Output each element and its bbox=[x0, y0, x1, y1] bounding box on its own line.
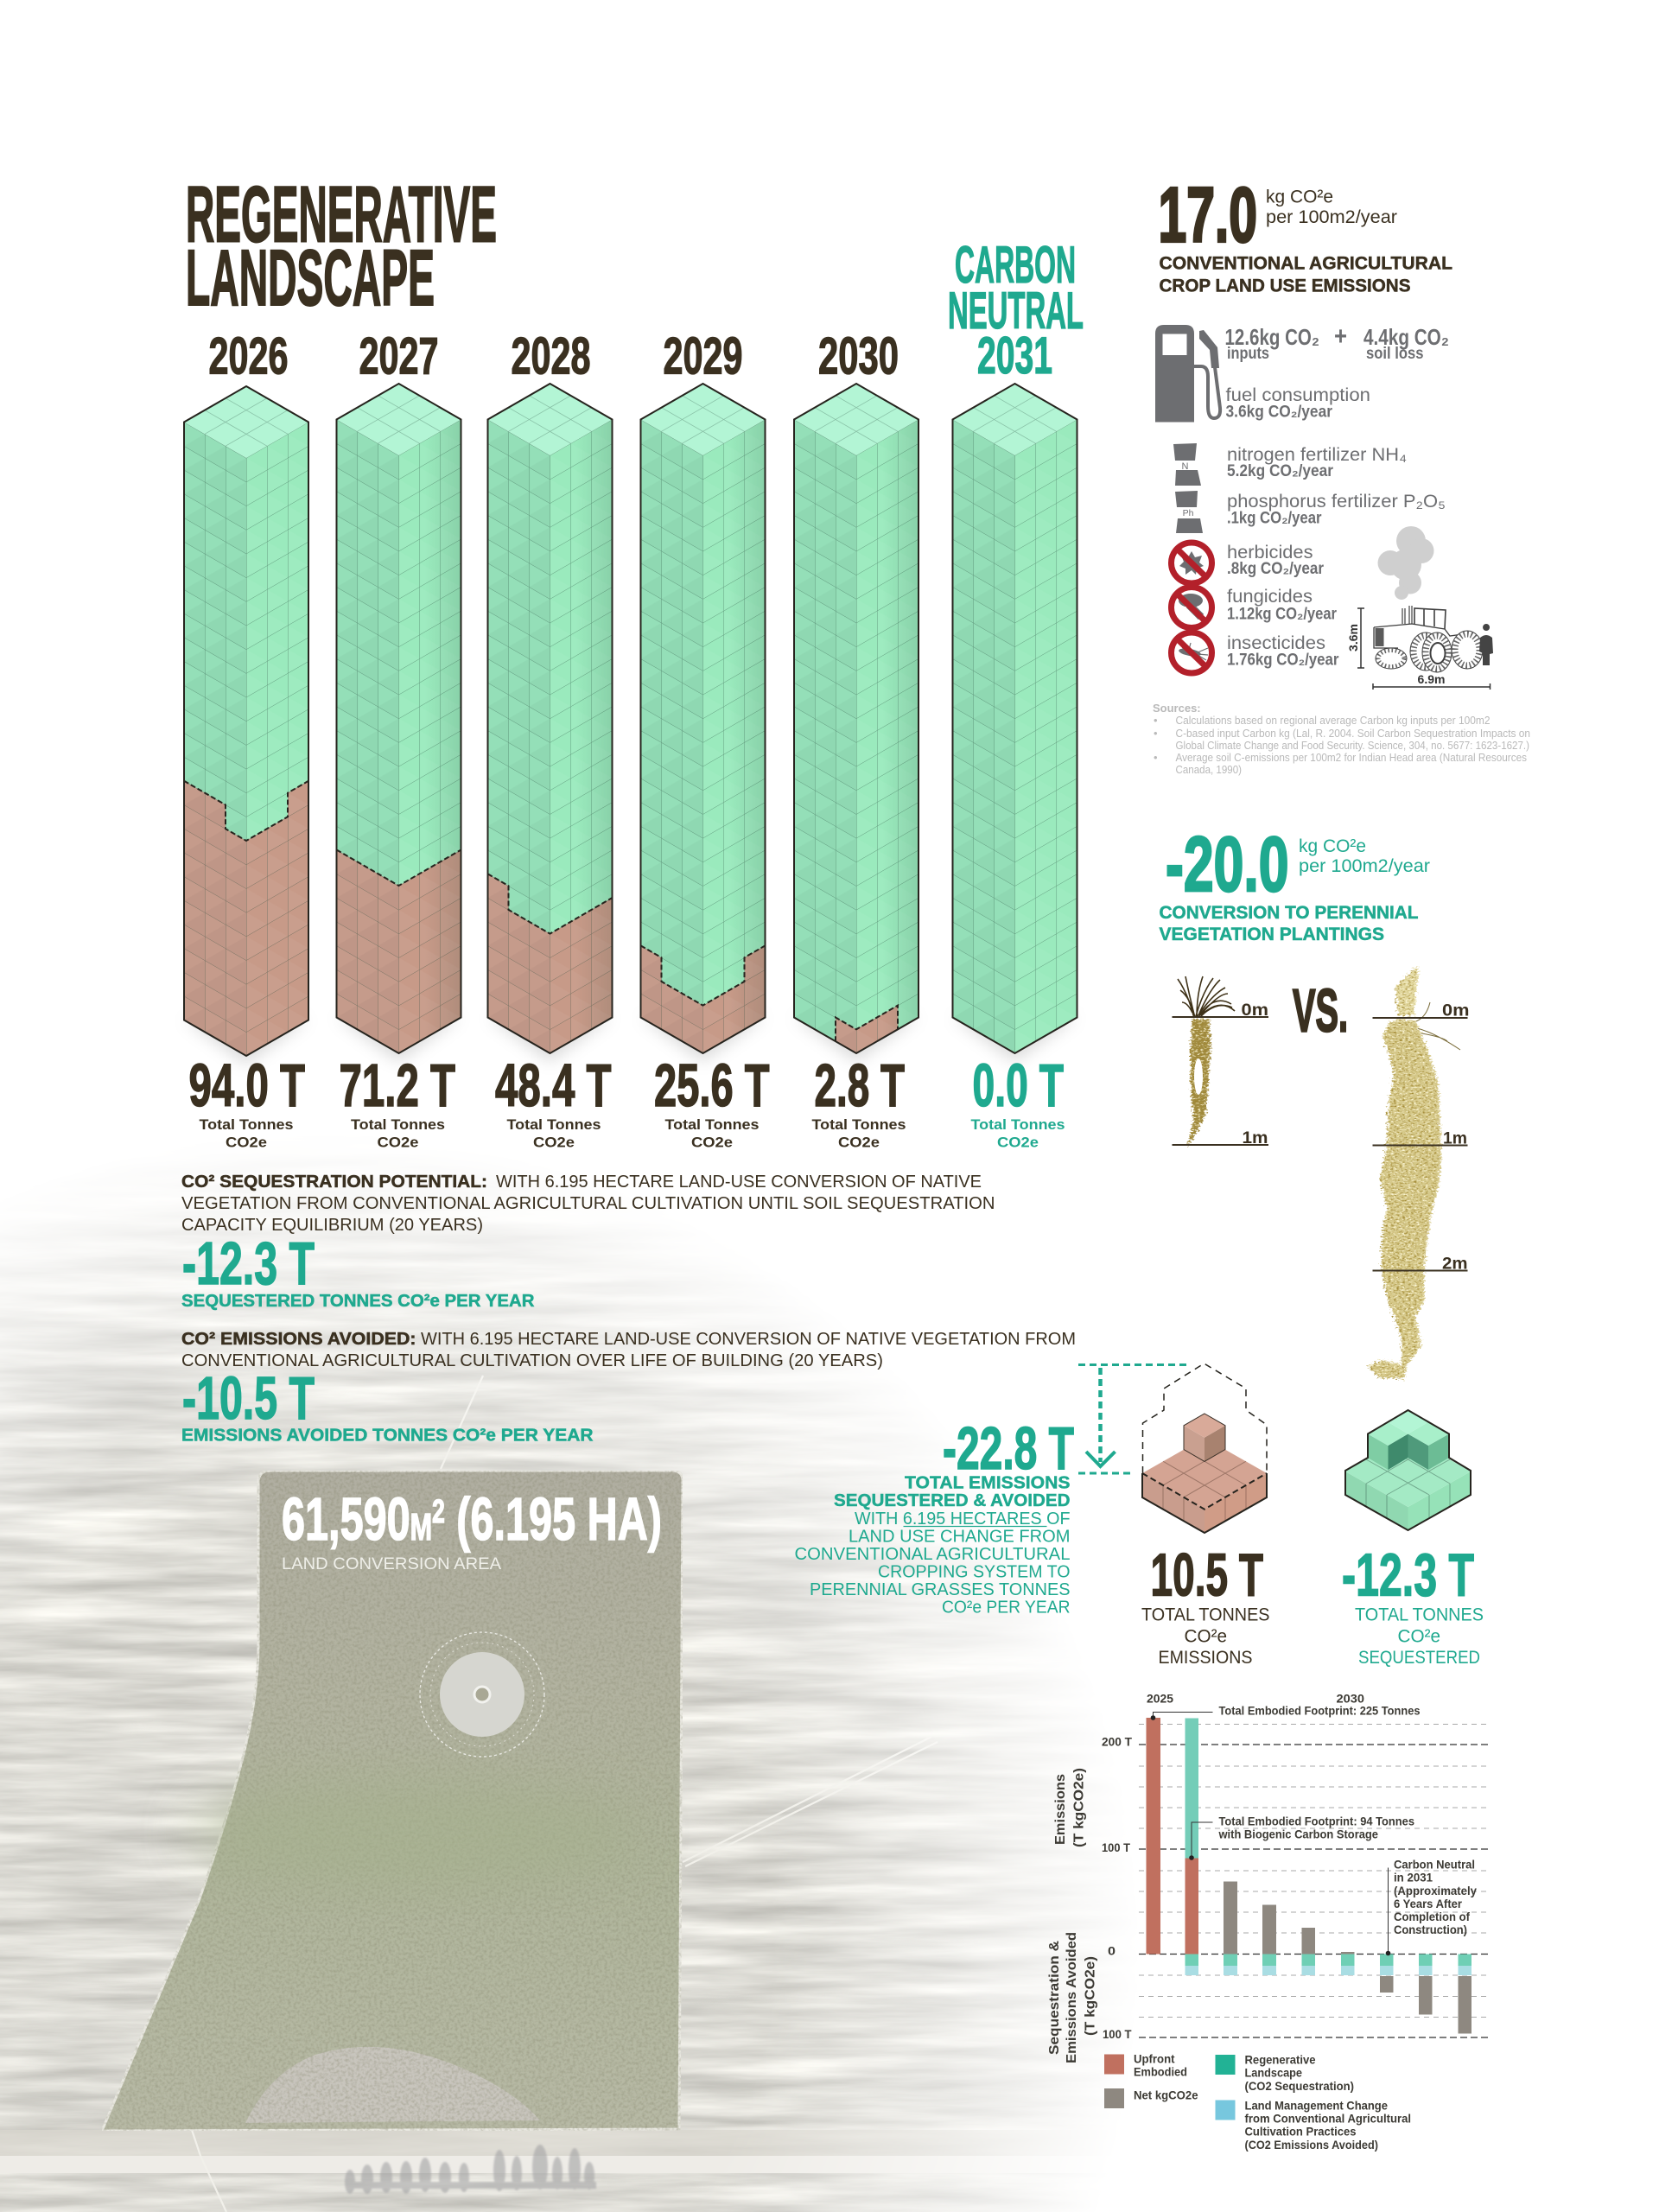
fungicides: fungicides bbox=[1227, 587, 1313, 607]
legend: (CO2 Sequestration) bbox=[1244, 2079, 1354, 2093]
callout: carbon neutral: 6 Years After bbox=[1394, 1897, 1463, 1910]
column total captions: CO2e bbox=[838, 1135, 880, 1151]
sources: Average soil C-emissions per 100m2 for Indian Head area (Natural Resources bbox=[1175, 751, 1527, 764]
legend: Cultivation Practices bbox=[1244, 2124, 1357, 2138]
stat: emissions total bbox=[1141, 1541, 1270, 1668]
column totals: 71.2 T bbox=[339, 1052, 455, 1119]
callout: carbon neutral: Carbon Neutral bbox=[1394, 1858, 1475, 1872]
column totals: 25.6 T bbox=[654, 1052, 769, 1119]
icon: sequestration cubes bbox=[1345, 1410, 1471, 1530]
phosphorus fertilizer bbox=[1227, 492, 1446, 527]
insecticides bbox=[1227, 633, 1339, 669]
stat: sequestered total: TOTAL TONNES bbox=[1355, 1605, 1484, 1624]
stat: -20.0: kg CO²e bbox=[1299, 836, 1366, 856]
scale: perennial root depths bbox=[1372, 1002, 1469, 1274]
text block: total emissions: CONVENTIONAL AGRICULTURAL bbox=[795, 1545, 1070, 1564]
callout: 94 tonnes bbox=[1189, 1815, 1414, 1860]
inputs and soil loss: 4.4kg CO₂ bbox=[1363, 324, 1449, 350]
text block: sequestration potential: WITH 6.195 HECTARE LAND-USE CONVERSION OF NATIVE bbox=[496, 1173, 982, 1192]
nitrogen fertilizer bbox=[1227, 445, 1407, 480]
insecticides: 1.76kg CO₂/year bbox=[1227, 652, 1339, 669]
sources: C-based input Carbon kg (Lal, R. 2004. Soil Carbon Sequestration Impacts on bbox=[1175, 727, 1530, 740]
root: annual crop bbox=[1178, 976, 1235, 1146]
title: REGENERATIVE bbox=[186, 171, 497, 259]
gravel pit bbox=[245, 2047, 540, 2123]
y axis titles bbox=[1047, 1768, 1097, 2063]
axis values: 100 T bbox=[1103, 2027, 1132, 2041]
dimension: 6.9m bbox=[1373, 672, 1490, 690]
legend: Land Management Change bbox=[1244, 2098, 1388, 2112]
year labels: 2030 bbox=[818, 327, 899, 385]
icon: no insecticides bbox=[1172, 632, 1211, 673]
dimension: 3.6m bbox=[1346, 608, 1364, 668]
column 2031 bbox=[952, 384, 1077, 1062]
heading: conventional: CONVENTIONAL AGRICULTURAL bbox=[1160, 254, 1452, 273]
stat: sequestered total: CO²e bbox=[1398, 1626, 1440, 1647]
land conversion parcel bbox=[102, 1471, 683, 2131]
column total captions: Total Tonnes bbox=[506, 1117, 601, 1133]
stat: -20.0: -20.0 bbox=[1166, 822, 1289, 908]
axis values: 200 T bbox=[1102, 1735, 1132, 1749]
stat: emissions total: TOTAL TONNES bbox=[1141, 1605, 1270, 1624]
text block: emissions avoided: CONVENTIONAL AGRICULTURAL CULTIVATION OVER LIFE OF BUILDING (20 YEARS) bbox=[181, 1351, 883, 1370]
axis values: 2030 bbox=[1336, 1692, 1364, 1706]
column total captions: Total Tonnes bbox=[971, 1117, 1065, 1133]
stat: emissions total: CO²e bbox=[1184, 1626, 1227, 1647]
stat: sequestered tonnes: SEQUESTERED TONNES CO²e PER YEAR bbox=[181, 1292, 535, 1311]
herbicides: herbicides bbox=[1227, 543, 1313, 563]
text block: sequestration potential: VEGETATION FROM CONVENTIONAL AGRICULTURAL CULTIVATION UNTIL SOIL SEQUESTRATION bbox=[181, 1194, 995, 1213]
area figure: 61,590M bbox=[282, 1485, 467, 1553]
stat: 17.0: per 100m2/year bbox=[1266, 207, 1397, 227]
column total captions: CO2e bbox=[377, 1135, 418, 1151]
text block: sequestration potential bbox=[181, 1173, 995, 1235]
axis values: 100 T bbox=[1102, 1840, 1130, 1854]
y axis titles: Emissions Avoided bbox=[1065, 1932, 1079, 2063]
text block: sequestration potential: CO² SEQUESTRATION POTENTIAL: bbox=[181, 1173, 487, 1192]
icon: nitrogen bags: N bbox=[1182, 461, 1189, 472]
bars bbox=[1146, 1718, 1471, 2034]
fungicides bbox=[1227, 587, 1338, 624]
stat: emissions avoided tonnes: EMISSIONS AVOIDED TONNES CO²e PER YEAR bbox=[181, 1426, 594, 1445]
inputs and soil loss: 12.6kg CO₂ bbox=[1225, 324, 1319, 350]
fungicides: 1.12kg CO₂/year bbox=[1227, 605, 1338, 624]
scale: crop root depths: 0m bbox=[1241, 1001, 1268, 1020]
phosphorus fertilizer: .1kg CO₂/year bbox=[1227, 510, 1322, 527]
icon: no herbicides bbox=[1172, 543, 1211, 583]
title bbox=[186, 171, 497, 322]
text block: total emissions: WITH 6.195 HECTARES OF bbox=[855, 1510, 1070, 1529]
inputs and soil loss bbox=[1225, 322, 1449, 363]
callout: carbon neutral: Construction) bbox=[1394, 1923, 1467, 1936]
scale: perennial root depths: 0m bbox=[1442, 1002, 1469, 1020]
axis values bbox=[1102, 1692, 1364, 2041]
callout: carbon neutral: in 2031 bbox=[1394, 1870, 1433, 1884]
callout: 225 tonnes bbox=[1151, 1704, 1421, 1720]
sources: Sources: bbox=[1153, 702, 1201, 715]
sources: Calculations based on regional average Carbon kg inputs per 100m2 bbox=[1175, 714, 1490, 727]
root: perennial grass bbox=[1367, 966, 1460, 1378]
column totals: 2.8 T bbox=[814, 1052, 905, 1119]
text block: total emissions: PERENNIAL GRASSES TONNES bbox=[810, 1580, 1070, 1599]
year labels bbox=[209, 327, 899, 385]
icon: fuel pump bbox=[1155, 325, 1220, 422]
stat: sequestered total: -12.3 T bbox=[1342, 1541, 1474, 1609]
nitrogen fertilizer: 5.2kg CO₂/year bbox=[1227, 462, 1334, 480]
column total captions: Total Tonnes bbox=[351, 1117, 445, 1133]
column total captions bbox=[199, 1117, 1065, 1151]
green band bbox=[190, 1780, 639, 1884]
column totals: 94.0 T bbox=[188, 1052, 305, 1119]
year labels: 2026 bbox=[209, 327, 289, 385]
column totals bbox=[188, 1052, 1064, 1119]
stat: sequestered total bbox=[1342, 1541, 1484, 1668]
panel: yearly isometric columns bbox=[184, 384, 1077, 1065]
stat: sequestered total: SEQUESTERED bbox=[1358, 1648, 1480, 1668]
icon: emissions cubes bbox=[1142, 1363, 1267, 1533]
text block: emissions avoided: WITH 6.195 HECTARE LAND-USE CONVERSION OF NATIVE VEGETATION FROM bbox=[421, 1330, 1076, 1349]
heading: conventional bbox=[1160, 254, 1452, 296]
fuel consumption: fuel consumption bbox=[1225, 385, 1370, 405]
herbicides: .8kg CO₂/year bbox=[1227, 560, 1325, 578]
fuel consumption: 3.6kg CO₂/year bbox=[1225, 403, 1333, 422]
column 2030 bbox=[794, 384, 918, 1062]
axis values: 2025 bbox=[1147, 1692, 1173, 1706]
scale: crop root depths bbox=[1172, 1001, 1268, 1147]
stat: emissions total: 10.5 T bbox=[1151, 1541, 1263, 1609]
text block: emissions avoided: CO² EMISSIONS AVOIDED: bbox=[181, 1330, 416, 1349]
insecticides: insecticides bbox=[1227, 633, 1325, 653]
panel: total emissions bbox=[795, 1363, 1484, 1668]
icon: phosphorus bags bbox=[1175, 491, 1203, 533]
stat: -20.0: per 100m2/year bbox=[1299, 856, 1430, 876]
column total captions: Total Tonnes bbox=[199, 1117, 294, 1133]
legend: Embodied bbox=[1134, 2065, 1187, 2079]
stat: sequestered tonnes bbox=[181, 1230, 535, 1311]
sources: • bbox=[1154, 727, 1158, 740]
carbon neutral heading bbox=[948, 236, 1084, 385]
area figure: 2 bbox=[432, 1494, 445, 1530]
legend: Landscape bbox=[1244, 2065, 1302, 2079]
versus label: VS. bbox=[1293, 976, 1348, 1044]
stat: sequestered tonnes: -12.3 T bbox=[182, 1230, 315, 1297]
y axis titles: (T kgCO2e) bbox=[1071, 1768, 1087, 1847]
area caption: LAND CONVERSION AREA bbox=[282, 1555, 501, 1573]
nitrogen fertilizer: nitrogen fertilizer NH₄ bbox=[1227, 445, 1407, 465]
text block: emissions avoided bbox=[181, 1330, 1076, 1370]
inputs and soil loss: inputs bbox=[1227, 345, 1269, 363]
column total captions: Total Tonnes bbox=[665, 1117, 759, 1133]
callout: 225 tonnes: Total Embodied Footprint: 225 Tonnes bbox=[1218, 1704, 1421, 1718]
sources: • bbox=[1154, 751, 1158, 764]
stat: emissions total: EMISSIONS bbox=[1158, 1648, 1253, 1668]
scale: perennial root depths: 2m bbox=[1442, 1255, 1467, 1274]
stat: 17.0 bbox=[1158, 173, 1397, 259]
grid lines bbox=[1139, 1725, 1491, 2037]
stat: 17.0: 17.0 bbox=[1158, 173, 1257, 259]
text block: total emissions: LAND USE CHANGE FROM bbox=[849, 1528, 1070, 1547]
callout: 94 tonnes: with Biogenic Carbon Storage bbox=[1218, 1827, 1378, 1840]
arrow: dashed bracket bbox=[1078, 1365, 1188, 1473]
column total captions: CO2e bbox=[226, 1135, 267, 1151]
heading: perennial bbox=[1160, 903, 1419, 944]
chart: emissions over time bbox=[1047, 1692, 1491, 2152]
column total captions: CO2e bbox=[997, 1135, 1039, 1151]
year labels: 2028 bbox=[512, 327, 591, 385]
stat: -22.8: -22.8 T bbox=[943, 1414, 1074, 1482]
panel: perennial conversion bbox=[1160, 822, 1469, 1378]
sources bbox=[1153, 702, 1530, 776]
sources: Global Climate Change and Food Security. Science, 304, no. 5677: 1623-1627.) bbox=[1175, 739, 1529, 752]
carbon neutral heading: CARBON bbox=[955, 236, 1076, 294]
carbon neutral heading: 2031 bbox=[977, 327, 1052, 385]
area figure: (6.195 HA) bbox=[445, 1485, 662, 1553]
inputs and soil loss: soil loss bbox=[1366, 345, 1424, 363]
y axis titles: Sequestration & bbox=[1047, 1941, 1062, 2055]
legend bbox=[1104, 2051, 1411, 2152]
year labels: 2029 bbox=[664, 327, 743, 385]
panel: conventional emissions bbox=[1153, 173, 1530, 776]
y axis titles: (T kgCO2e) bbox=[1084, 1956, 1097, 2036]
icon: no fungicides bbox=[1172, 588, 1211, 627]
callout: carbon neutral: (Approximately bbox=[1394, 1884, 1477, 1897]
callout: 94 tonnes: Total Embodied Footprint: 94 Tonnes bbox=[1218, 1815, 1414, 1828]
heading: perennial: VEGETATION PLANTINGS bbox=[1160, 925, 1384, 944]
herbicides bbox=[1227, 543, 1325, 578]
legend: (CO2 Emissions Avoided) bbox=[1244, 2138, 1378, 2152]
legend: Net kgCO2e bbox=[1134, 2088, 1198, 2101]
text block: total emissions: TOTAL EMISSIONS bbox=[905, 1472, 1070, 1493]
year labels: 2027 bbox=[359, 327, 439, 385]
column total captions: Total Tonnes bbox=[812, 1117, 906, 1133]
background: faded aerial field bbox=[0, 1189, 1096, 2212]
column totals: 0.0 T bbox=[973, 1052, 1064, 1119]
carbon neutral heading: NEUTRAL bbox=[948, 282, 1084, 340]
legend: Upfront bbox=[1134, 2051, 1175, 2065]
icon: smoke bbox=[1377, 526, 1434, 600]
inputs and soil loss: + bbox=[1334, 322, 1347, 351]
text block: total emissions: CO²e PER YEAR bbox=[942, 1599, 1070, 1618]
column total captions: CO2e bbox=[533, 1135, 575, 1151]
sources: • bbox=[1154, 714, 1158, 727]
text block: sequestration potential: CAPACITY EQUILIBRIUM (20 YEARS) bbox=[181, 1216, 483, 1235]
text block: total emissions: CROPPING SYSTEM TO bbox=[878, 1562, 1070, 1581]
stat: emissions avoided tonnes bbox=[181, 1364, 594, 1445]
text block: total emissions bbox=[795, 1472, 1070, 1618]
legend: Regenerative bbox=[1244, 2053, 1316, 2067]
sources: Canada, 1990) bbox=[1175, 763, 1242, 776]
building footprint circle bbox=[420, 1632, 544, 1757]
column 2028 bbox=[487, 384, 612, 1062]
y axis titles: Emissions bbox=[1053, 1774, 1068, 1845]
heading: conventional: CROP LAND USE EMISSIONS bbox=[1160, 276, 1410, 296]
title: LANDSCAPE bbox=[186, 234, 435, 322]
icon: nitrogen bags bbox=[1173, 443, 1201, 486]
column 2027 bbox=[337, 384, 461, 1062]
column total captions: CO2e bbox=[691, 1135, 733, 1151]
heading: perennial: CONVERSION TO PERENNIAL bbox=[1160, 903, 1419, 923]
icon: tractor with person bbox=[1374, 606, 1493, 672]
callout: carbon neutral bbox=[1386, 1858, 1477, 1955]
scale: perennial root depths: 1m bbox=[1443, 1130, 1467, 1147]
fuel consumption bbox=[1225, 385, 1370, 422]
stat: -20.0 bbox=[1166, 822, 1430, 908]
column totals: 48.4 T bbox=[495, 1052, 612, 1119]
icon: phosphorus bags: Ph bbox=[1183, 508, 1194, 518]
callout: carbon neutral: Completion of bbox=[1394, 1910, 1470, 1923]
text block: total emissions: SEQUESTERED & AVOIDED bbox=[834, 1491, 1070, 1510]
column 2026 bbox=[184, 386, 308, 1065]
stat: emissions avoided tonnes: -10.5 T bbox=[182, 1364, 315, 1432]
dimension: 3.6m: 3.6m bbox=[1346, 624, 1360, 652]
column 2029 bbox=[641, 384, 766, 1062]
stat: 17.0: kg CO²e bbox=[1266, 187, 1333, 207]
dimension: 6.9m: 6.9m bbox=[1418, 672, 1445, 686]
phosphorus fertilizer: phosphorus fertilizer P₂O₅ bbox=[1227, 492, 1446, 512]
scale: crop root depths: 1m bbox=[1243, 1129, 1268, 1147]
axis values: 0 bbox=[1108, 1944, 1116, 1958]
legend: from Conventional Agricultural bbox=[1244, 2112, 1411, 2126]
